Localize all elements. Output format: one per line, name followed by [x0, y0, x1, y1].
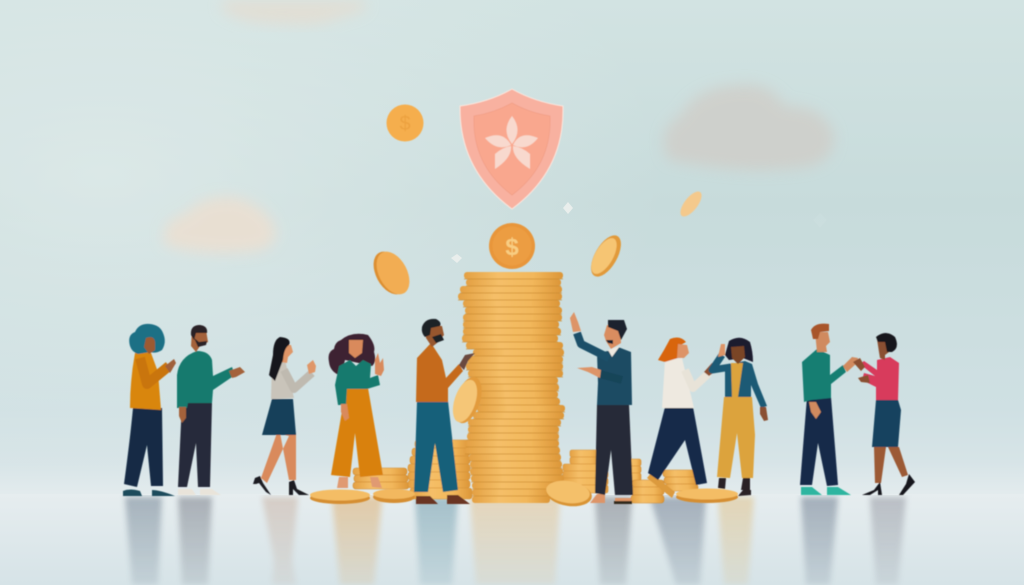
- flower star: [485, 116, 538, 169]
- coin: centre dollar: $: [505, 234, 519, 261]
- trousers: [414, 401, 458, 492]
- hair: [329, 334, 375, 376]
- coin stack edge lines: [458, 279, 565, 496]
- jacket: [725, 361, 767, 408]
- coin left flat: [310, 490, 370, 504]
- arm: [284, 370, 312, 389]
- coin: pale top left: [386, 104, 424, 142]
- face: [144, 337, 155, 354]
- feet and shoe: [718, 478, 751, 496]
- legs: [874, 447, 908, 483]
- hand: [704, 363, 719, 376]
- hair: [811, 324, 829, 339]
- pile right of stack: [563, 450, 641, 493]
- feet: [590, 494, 632, 503]
- heels: [862, 474, 915, 495]
- shield emblem: [460, 89, 563, 209]
- hand left: [179, 407, 186, 423]
- person 10: woman in pink top, navy skirt: [853, 333, 915, 495]
- face: [731, 346, 745, 364]
- shoes: [416, 495, 470, 504]
- head: [426, 325, 444, 347]
- coin: centre dollar: [489, 223, 535, 269]
- shoes: [801, 487, 851, 495]
- person 8: mustard trousers, teal jacket: [712, 338, 768, 496]
- skirt: [262, 399, 296, 435]
- trousers: [178, 402, 212, 487]
- lower hand: [577, 367, 601, 378]
- hair and beard: [422, 319, 444, 343]
- face: [677, 344, 689, 358]
- heels: [253, 476, 309, 495]
- sweater: [177, 351, 235, 408]
- hair: [876, 333, 897, 352]
- lower arm: [600, 374, 622, 380]
- pile behind central man: [408, 440, 472, 499]
- lower hand: [760, 407, 768, 421]
- skirt: [872, 400, 901, 447]
- coin second flat: [373, 489, 415, 503]
- person 6: man in blue sweater, raised arm: [570, 312, 633, 504]
- raised hand: [570, 312, 581, 332]
- trousers: [717, 397, 755, 478]
- tilted coin on pile: [647, 473, 675, 498]
- hand: [459, 353, 475, 370]
- shield inner: [474, 103, 550, 195]
- head: [278, 345, 293, 363]
- floor: [0, 494, 1024, 585]
- hand raised: [375, 353, 384, 376]
- coin: tilted left: [367, 246, 416, 300]
- collar: [608, 346, 620, 357]
- sweater: [416, 343, 463, 402]
- sparkles: [451, 202, 827, 263]
- hair and beard: [606, 320, 627, 344]
- raised hand: [718, 344, 725, 357]
- trousers: [595, 404, 633, 495]
- pile lower right: [631, 470, 698, 503]
- arm: [685, 370, 709, 388]
- ground group: people and coins: [123, 272, 915, 509]
- coin right flat: [676, 488, 738, 503]
- sweater: [802, 349, 846, 402]
- person 2: bearded man, teal sweater: [177, 325, 245, 495]
- face: [349, 340, 363, 358]
- person 4: curly hair, teal top, orange trousers: [329, 334, 384, 488]
- legs: [261, 433, 296, 483]
- person 9: man in teal sweater, handshake: [800, 324, 858, 495]
- raised arm: [712, 355, 731, 370]
- shoe: [614, 501, 632, 504]
- hand: [165, 359, 176, 373]
- hand shake: [843, 357, 858, 372]
- hand down: [809, 402, 821, 419]
- person 5: bearded man, orange sweater, teal trousers: [414, 319, 475, 504]
- hand down: [341, 404, 349, 421]
- hair: [725, 338, 753, 362]
- top: [335, 360, 380, 405]
- hand right: [229, 367, 245, 378]
- leaning coin on stack: [448, 373, 487, 427]
- arm: [140, 358, 169, 384]
- person 7: orange hair, white top: [648, 338, 719, 485]
- head: [877, 339, 889, 360]
- coin: pale falling right: [677, 188, 705, 220]
- coin: tilted right: [585, 231, 627, 281]
- reflection of people and coins on the floor: [125, 497, 906, 585]
- torso: [130, 351, 161, 410]
- coin fallen at stack base: [545, 478, 593, 509]
- top: [662, 358, 694, 408]
- legs: [124, 408, 163, 487]
- cloud: left: [164, 197, 276, 253]
- cloud: right: [664, 84, 834, 170]
- head: [815, 332, 830, 352]
- hair and beard: [191, 325, 207, 347]
- hand: [307, 360, 316, 374]
- feet: [337, 477, 382, 488]
- pink top: [860, 357, 899, 400]
- hair: [269, 337, 290, 381]
- trousers: [331, 388, 383, 477]
- head: [604, 325, 621, 349]
- cloud: top: [222, 0, 366, 25]
- shield outer: [460, 89, 563, 209]
- pile left low: [353, 468, 409, 489]
- head: [191, 330, 208, 352]
- trousers: [800, 397, 838, 486]
- person 1: afro hair, orange top: [123, 324, 176, 496]
- hair: [129, 324, 165, 354]
- person 3: black hair, grey top, navy skirt: [253, 337, 316, 495]
- yellow top: [731, 363, 743, 397]
- hair: [658, 338, 686, 362]
- flat coins on floor: [310, 488, 738, 504]
- coin piles behind the figures: [353, 440, 698, 503]
- sweater: [597, 347, 632, 405]
- hands: [853, 358, 870, 383]
- top: [271, 360, 294, 399]
- raised arm: [577, 333, 609, 358]
- shoes: [178, 489, 221, 495]
- trousers: [648, 407, 707, 485]
- coin: pale top left: $: [399, 113, 411, 135]
- main coin stack: [458, 272, 565, 503]
- shoes: [123, 490, 175, 496]
